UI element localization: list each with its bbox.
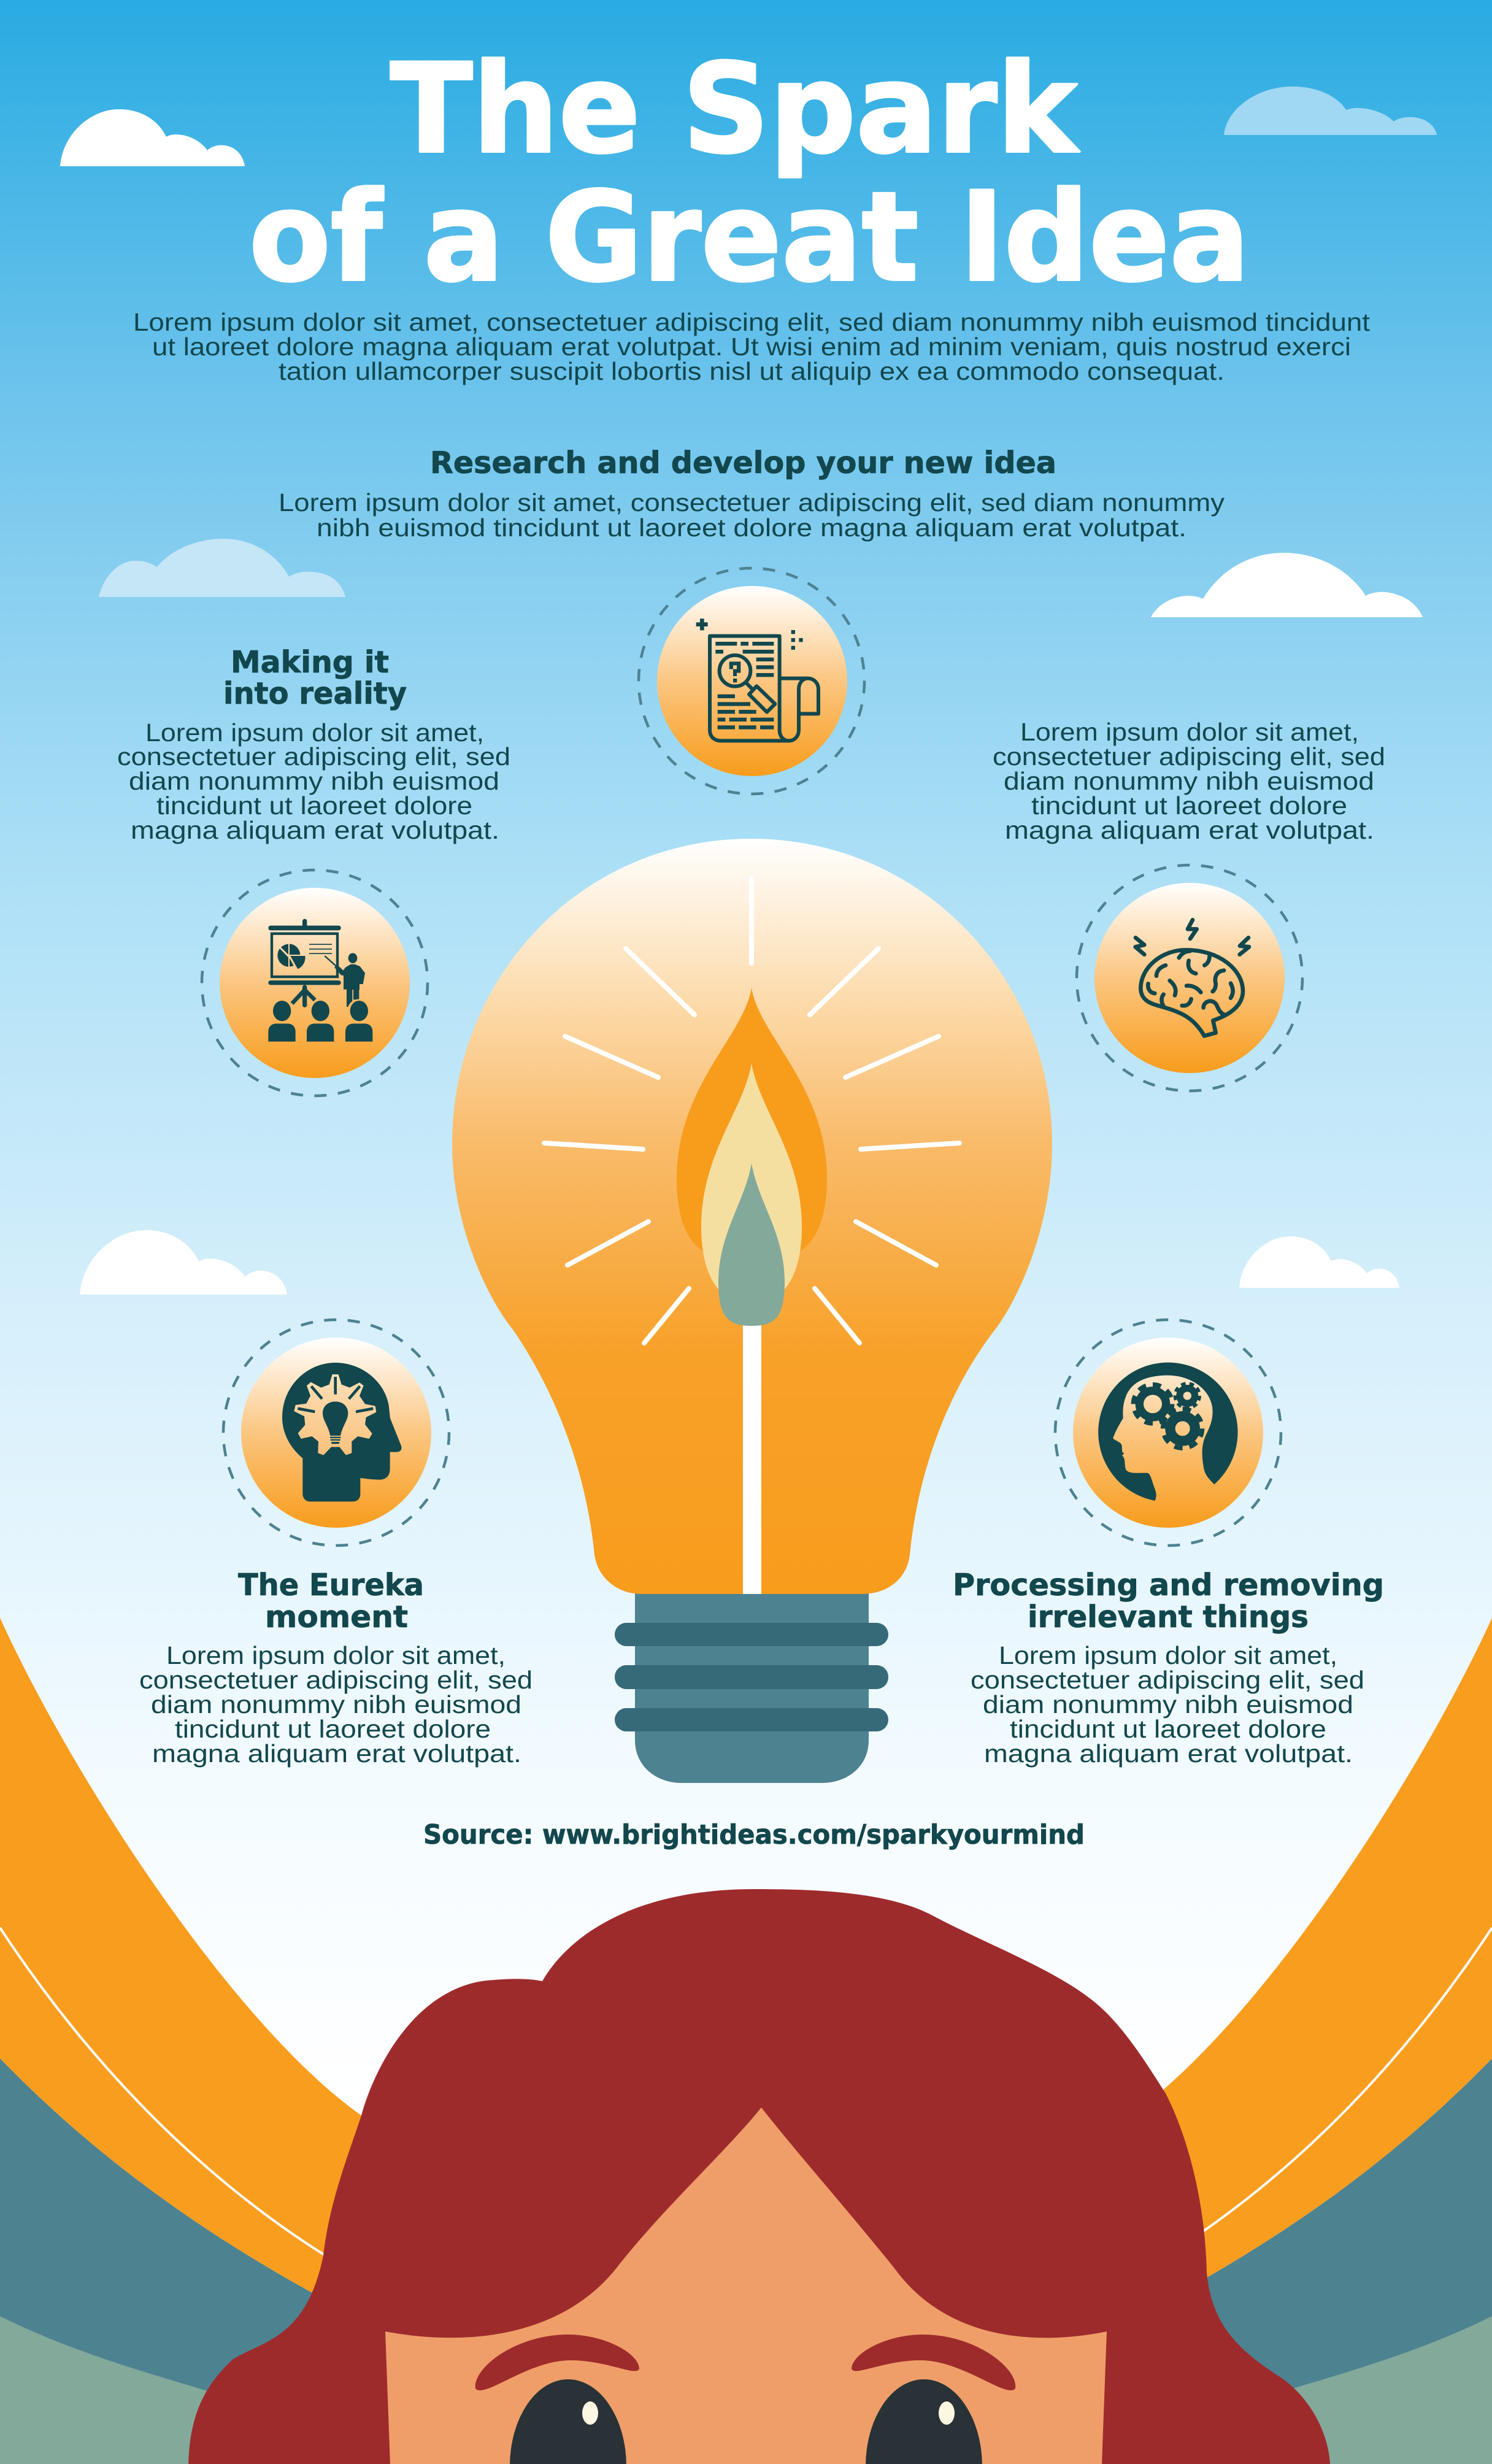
cloud: mid left <box>99 539 345 597</box>
bulb rays <box>544 879 959 1343</box>
icon: research document <box>639 568 864 794</box>
panel: research <box>279 445 1225 794</box>
body: making it into reality: consectetuer adipiscing elit, sed <box>117 742 510 771</box>
band: orange arcs <box>0 1618 1492 2331</box>
icon: brain <box>1077 865 1302 1091</box>
hair <box>188 1889 1330 2464</box>
body: processing <box>971 1641 1364 1768</box>
heading: processing: irrelevant things <box>1028 1600 1309 1634</box>
heading: making it into reality: Making it <box>231 645 389 680</box>
face skin <box>385 2108 1107 2464</box>
body: brain: magna aliquam erat volutpat. <box>1005 816 1374 844</box>
cloud: top right <box>1224 87 1437 135</box>
cloud: lower right <box>1239 1236 1399 1288</box>
band: white lines <box>0 1928 1492 2255</box>
icon: head with gears <box>1055 1320 1281 1546</box>
body: eureka moment: diam nonummy nibh euismod <box>151 1690 521 1719</box>
bulb socket <box>615 1589 888 1783</box>
heading: eureka moment: The Eureka <box>238 1568 424 1603</box>
heading: processing: Processing and removing <box>953 1568 1384 1603</box>
clouds <box>60 87 1437 1295</box>
panel: processing <box>953 1320 1384 1768</box>
icon: head with gear and bulb <box>223 1320 449 1546</box>
body: making it into reality: tincidunt ut laoreet dolore <box>156 791 472 820</box>
body: processing: diam nonummy nibh euismod <box>983 1690 1353 1719</box>
body: processing: magna aliquam erat volutpat. <box>984 1739 1353 1768</box>
body: making it into reality: diam nonummy nibh euismod <box>129 767 499 795</box>
cloud: lower left <box>80 1230 287 1295</box>
eyebrow left <box>475 2335 639 2390</box>
body: brain <box>993 718 1385 844</box>
match stick <box>743 1322 761 1594</box>
body: processing: Lorem ipsum dolor sit amet, <box>999 1641 1337 1669</box>
eyebrow right <box>852 2335 1015 2390</box>
body: brain: tincidunt ut laoreet dolore <box>1031 791 1347 820</box>
body: eureka moment: magna aliquam erat volutpat. <box>152 1739 521 1768</box>
cloud: mid right <box>1151 553 1423 617</box>
body: processing: consectetuer adipiscing elit, sed <box>971 1666 1364 1694</box>
heading: research: Research and develop your new idea <box>430 445 1056 480</box>
body: making it into reality <box>117 718 510 844</box>
body: brain: consectetuer adipiscing elit, sed <box>993 742 1385 771</box>
body: processing: tincidunt ut laoreet dolore <box>1010 1715 1326 1743</box>
body: eureka moment <box>139 1641 533 1768</box>
body: research: nibh euismod tincidunt ut laoreet dolore magna aliquam erat volutpat. <box>317 514 1186 542</box>
title: of a Great Idea <box>249 166 1250 309</box>
body: making it into reality: Lorem ipsum dolor sit amet, <box>145 718 484 747</box>
body: research <box>279 488 1225 542</box>
panel: brain <box>993 718 1385 1091</box>
flame <box>677 988 827 1326</box>
heading: making it into reality: into reality <box>223 676 407 711</box>
background bands <box>0 1618 1492 2464</box>
body: eureka moment: Lorem ipsum dolor sit amet, <box>166 1641 506 1669</box>
bulb glass <box>452 839 1052 1594</box>
heading: eureka moment <box>238 1568 424 1634</box>
body: making it into reality: magna aliquam erat volutpat. <box>131 816 499 844</box>
band: green hills <box>0 2313 1492 2464</box>
panel: making it into reality <box>117 645 510 1096</box>
intro text: ut laoreet dolore magna aliquam erat volutpat. Ut wisi enim ad minim veniam, quis nostrud exerci <box>152 333 1351 361</box>
eye right <box>866 2379 982 2464</box>
title <box>249 37 1250 309</box>
body: eureka moment: tincidunt ut laoreet dolore <box>175 1715 491 1743</box>
body: research: Lorem ipsum dolor sit amet, consectetuer adipiscing elit, sed diam nonummy <box>279 488 1225 517</box>
eye left <box>510 2379 626 2464</box>
title: The Spark <box>390 37 1080 181</box>
heading: processing <box>953 1568 1384 1634</box>
panel: eureka moment <box>139 1320 533 1768</box>
intro text: tation ullamcorper suscipit lobortis nisl ut aliquip ex ea commodo consequat. <box>279 357 1225 385</box>
heading: eureka moment: moment <box>265 1600 408 1634</box>
body: brain: diam nonummy nibh euismod <box>1004 767 1374 795</box>
heading: making it into reality <box>223 645 407 711</box>
intro text <box>133 308 1371 385</box>
body: eureka moment: consectetuer adipiscing elit, sed <box>139 1666 533 1694</box>
cloud: top left <box>60 109 245 166</box>
light bulb <box>452 839 1052 1783</box>
character face <box>188 1889 1330 2464</box>
source line: Source: www.brightideas.com/sparkyourmind <box>423 1819 1085 1850</box>
intro text: Lorem ipsum dolor sit amet, consectetuer adipiscing elit, sed diam nonummy nibh euismod tincidunt <box>133 308 1371 336</box>
icon: presenter <box>202 870 428 1096</box>
body: brain: Lorem ipsum dolor sit amet, <box>1020 718 1359 746</box>
band: teal arcs <box>0 2058 1492 2424</box>
